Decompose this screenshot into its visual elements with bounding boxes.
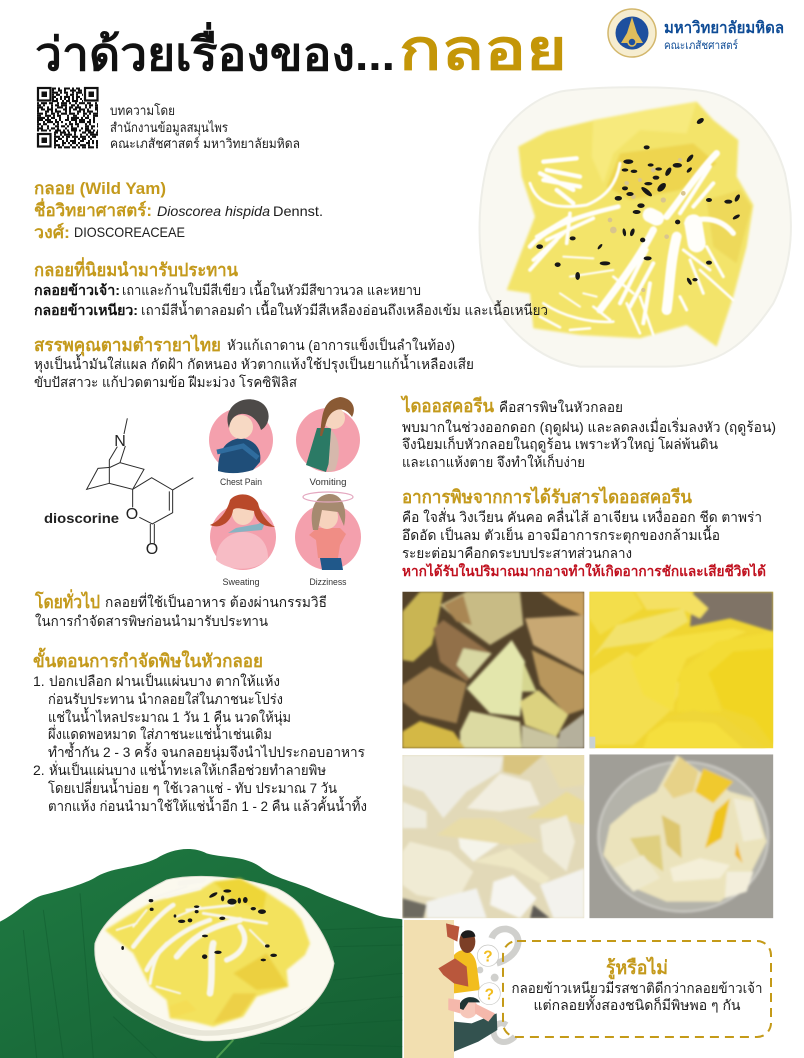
section: popular yams: กลอยข้าวเหนียว: (34, 302, 138, 318)
section: detox steps: ตากแห้ง ก่อนนำมาใช้ให้แช่น้ำอีก 1 - 2 คืน แล้วคั้นน้ำทิ้ง (48, 796, 367, 814)
section: detox steps (33, 647, 367, 814)
section: dioscorine definition: คือสารพิษในหัวกลอย (499, 399, 623, 415)
section: dioscorine definition: ไดออสคอรีน (400, 395, 495, 416)
section: general note: กลอยที่ใช้เป็นอาหาร ต้องผ่านกรรมวิธี (105, 593, 327, 610)
plant identity (34, 179, 323, 242)
icon: chest pain: Chest Pain (220, 477, 262, 487)
chemical structure: dioscorine (44, 418, 193, 558)
icon: vomiting (296, 397, 360, 487)
section: popular yams: เถามีสีน้ำตาลอมดำ เนื้อในหัวมีสีเหลืองอ่อนถึงเหลืองเข้ม และเนื้อเหนียว (141, 300, 548, 318)
section: detox steps: หั่นเป็นแผ่นบาง แช่น้ำทะเลให้เกลือช่วยทำลายพิษ (49, 760, 326, 778)
plant identity: Dennst. (273, 203, 323, 219)
chemical structure: dioscorine: O (146, 541, 158, 558)
plant identity: ชื่อวิทยาศาสตร์: (34, 198, 152, 220)
byline: คณะเภสัชศาสตร์ มหาวิทยาลัยมหิดล (110, 136, 300, 151)
icon: dizziness (295, 492, 361, 587)
section: detox steps: 2. (33, 762, 45, 778)
panel: did you know illustration: ? (485, 987, 494, 1004)
section: popular yams: เถาและก้านใบมีสีเขียว เนื้อในหัวมีสีขาวนวล และหยาบ (122, 280, 421, 298)
panel: did you know illustration (404, 920, 518, 1058)
section: poisoning symptoms (402, 486, 766, 579)
section: detox steps: โดยเปลี่ยนน้ำบ่อย ๆ ใช้เวลาแช่ - ทับ ประมาณ 7 วัน (48, 778, 337, 796)
section: detox steps: ก่อนรับประทาน นำกลอยใส่ในภาชนะโปร่ง (48, 691, 283, 707)
logo: Mahidol University: คณะเภสัชศาสตร์ (664, 38, 738, 52)
plant identity: Dioscorea hispida (157, 203, 270, 219)
photo: soaked yam in metal bowl (589, 754, 773, 918)
title: ว่าด้วยเรื่องของ... (35, 22, 395, 80)
section: Thai medicinal properties: ขับปัสสาวะ แก้ปวดตามข้อ ฝีมะม่วง โรคซิฟิลิส (34, 374, 297, 390)
section: detox steps: ผึ่งแดดพอหมาด ใส่ภาชนะแช่น้ำเช่นเดิม (48, 724, 272, 742)
section: general note: ในการกำจัดสารพิษก่อนนำมารับประทาน (35, 613, 268, 629)
section: dioscorine definition: และเถาแห้งตาย จึงทำให้เก็บง่าย (402, 453, 585, 470)
title: กลอย (399, 18, 567, 81)
logo: Mahidol University (608, 9, 784, 57)
chemical structure: dioscorine: dioscorine (44, 510, 119, 526)
photo: dried yam flakes (402, 755, 584, 918)
section: general note (34, 589, 327, 629)
section: detox steps: 1. (33, 673, 45, 689)
logo: Mahidol University: มหาวิทยาลัยมหิดล (664, 19, 784, 37)
panel: did you know illustration: ? (483, 949, 493, 966)
section: Thai medicinal properties: สรรพคุณตามตำรายาไทย (34, 334, 221, 357)
section: popular yams (34, 257, 548, 318)
section: general note: โดยทั่วไป (34, 589, 100, 612)
photo: grated yam dish on white plate (480, 87, 791, 367)
section: detox steps: ขั้นตอนการกำจัดพิษในหัวกลอย (33, 647, 263, 671)
section: dioscorine definition (400, 395, 776, 470)
plant identity: วงศ์: (34, 222, 70, 242)
photo: peeled yam chunks (402, 592, 584, 748)
callout: did you know: รู้หรือไม่ (606, 956, 668, 980)
icon: sweating (210, 494, 276, 587)
section: detox steps: ปอกเปลือก ฝานเป็นแผ่นบาง ตากให้แห้ง (49, 672, 280, 689)
QR code (37, 88, 98, 147)
section: poisoning symptoms: อาการพิษจากการได้รับสารไดออสคอรีน (402, 486, 693, 507)
section: Thai medicinal properties (34, 334, 474, 390)
section: poisoning symptoms: ระยะต่อมาคือกดระบบประสาทส่วนกลาง (402, 545, 632, 561)
section: Thai medicinal properties: หุงเป็นน้ำมันใส่แผล กัดฝ้า กัดหนอง หัวตากแห้งใช้ปรุงเป็นยาแก้น้ำเหลืองเสีย (34, 354, 474, 373)
callout: did you know: กลอยข้าวเหนียวมีรสชาติดีกว่ากลอยข้าวเจ้า (512, 980, 762, 996)
chemical structure: dioscorine: N (114, 433, 126, 450)
byline: บทความโดย (110, 103, 175, 118)
byline: สำนักงานข้อมูลสมุนไพร (110, 120, 228, 136)
section: dioscorine definition: จึงนิยมเก็บหัวกลอยในฤดูร้อน เพราะหัวใหญ่ โผล่พ้นดิน (402, 435, 718, 453)
callout: did you know (503, 941, 771, 1037)
section: popular yams: กลอยที่นิยมนำมารับประทาน (34, 257, 239, 280)
section: poisoning symptoms: อึดอัด เป็นลม ตัวเย็น อาจมีอาการกระตุกของกล้ามเนื้อ (402, 525, 720, 544)
section: poisoning symptoms: หากได้รับในปริมาณมากอาจทำให้เกิดอาการชักและเสียชีวิตได้ (402, 562, 766, 579)
section: poisoning symptoms: คือ ใจสั่น วิงเวียน คันคอ คลื่นไส้ อาเจียน เหงื่อออก ชีด ตาพร่า (402, 508, 762, 525)
callout: did you know: แต่กลอยทั้งสองชนิดก็มีพิษพอ ๆ กัน (534, 995, 741, 1013)
icon: sweating: Sweating (222, 577, 260, 587)
icon: vomiting: Vomiting (310, 477, 346, 487)
section: Thai medicinal properties: หัวแก้เถาดาน (อาการแข็งเป็นลำในท้อง) (227, 336, 455, 353)
title (35, 18, 567, 81)
section: popular yams: กลอยข้าวเจ้า: (34, 282, 120, 298)
chemical structure: dioscorine: O (126, 506, 138, 523)
icon: chest pain (209, 399, 273, 487)
section: detox steps: ทำซ้ำกัน 2 - 3 ครั้ง จนกลอยนุ่มจึงนำไปประกอบอาหาร (48, 742, 365, 761)
plant identity: กลอย (Wild Yam) (34, 179, 166, 198)
byline (110, 103, 300, 151)
plant identity: DIOSCOREACEAE (74, 224, 185, 240)
section: dioscorine definition: พบมากในช่วงออกดอก (ฤดูฝน) และลดลงเมื่อเริ่มลงหัว (ฤดูร้อน) (402, 418, 776, 436)
icon: dizziness: Dizziness (310, 577, 347, 587)
photo: yam dish on banana leaf (0, 849, 402, 1058)
section: detox steps: แช่ในน้ำไหลประมาณ 1 วัน 1 คืน นวดให้นุ่ม (48, 707, 291, 726)
photo: sliced yellow yam (589, 592, 773, 748)
